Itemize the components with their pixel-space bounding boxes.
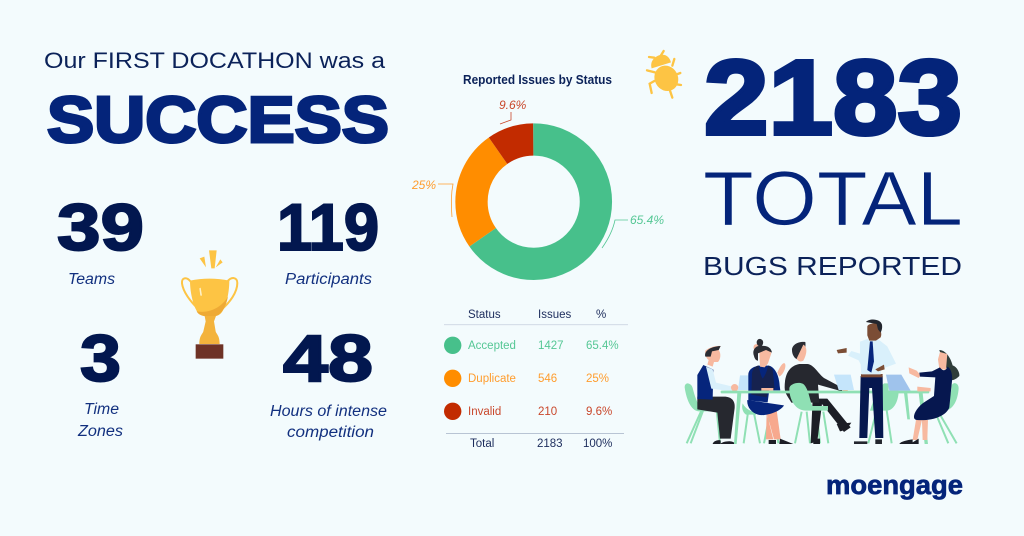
icon: bug <box>647 51 683 98</box>
label: 25% <box>411 178 453 217</box>
row: duplicate: 546 <box>538 373 557 385</box>
donut chart <box>411 98 664 264</box>
laptop <box>886 375 911 391</box>
stat: teams <box>57 190 144 288</box>
row: accepted: 1427 <box>538 340 564 352</box>
stat: time zones: 3 <box>80 321 121 395</box>
total label: TOTAL <box>703 156 963 242</box>
heading: success: SUCCESS <box>47 83 389 156</box>
row: total <box>446 433 624 450</box>
big number: 2183 <box>704 39 962 157</box>
stat: time zones <box>77 321 123 440</box>
stat: participants: Participants <box>285 271 372 288</box>
table header: % <box>596 309 606 321</box>
stat: hours: Hours of intense <box>270 403 387 420</box>
front chair <box>789 383 828 411</box>
stat: teams: 39 <box>57 190 144 264</box>
illustration: team meeting <box>685 319 959 444</box>
person 1 <box>697 346 738 444</box>
stat: hours: competition <box>287 424 374 441</box>
person 5 <box>899 350 959 444</box>
bugs reported label: BUGS REPORTED <box>703 251 962 281</box>
label: 9.6% <box>499 98 527 124</box>
person 3 <box>785 342 851 444</box>
laptop <box>834 375 854 390</box>
row: duplicate <box>444 370 609 387</box>
row: accepted <box>444 337 619 354</box>
back chairs <box>687 410 957 443</box>
row: invalid: 9.6% <box>586 406 612 418</box>
row: invalid: Invalid <box>468 406 501 418</box>
stat: time zones: Time <box>84 401 119 418</box>
table header <box>444 309 628 325</box>
row: invalid: 210 <box>538 406 557 418</box>
table <box>444 309 628 450</box>
person 2 <box>738 339 793 444</box>
stat: participants: 119 <box>277 190 379 264</box>
logo: moengage: moengage <box>826 470 963 500</box>
table header: Status <box>468 309 501 321</box>
icon: trophy <box>182 250 237 359</box>
stat: hours <box>270 321 387 441</box>
label: 65.4%: 65.4% <box>630 213 664 227</box>
row: accepted: Accepted <box>468 340 516 352</box>
row: duplicate: Duplicate <box>468 373 516 385</box>
table header: Issues <box>538 309 571 321</box>
heading line: Our FIRST DOCATHON was a <box>44 48 386 73</box>
row: duplicate: 25% <box>586 373 609 385</box>
chart title: Reported Issues by Status <box>463 73 612 87</box>
row: invalid <box>444 403 612 420</box>
row: total: 2183 <box>537 438 563 450</box>
stat: time zones: Zones <box>77 423 123 440</box>
stat: hours: 48 <box>283 321 373 395</box>
table <box>721 391 929 444</box>
row: total: Total <box>470 438 494 450</box>
row: total: 100% <box>583 438 612 450</box>
label: 65.4% <box>602 213 664 248</box>
person 4: presenter <box>837 319 896 444</box>
label: 25%: 25% <box>411 178 436 192</box>
row: accepted: 65.4% <box>586 340 619 352</box>
stat: teams: Teams <box>68 271 115 288</box>
label: 9.6%: 9.6% <box>499 98 527 112</box>
